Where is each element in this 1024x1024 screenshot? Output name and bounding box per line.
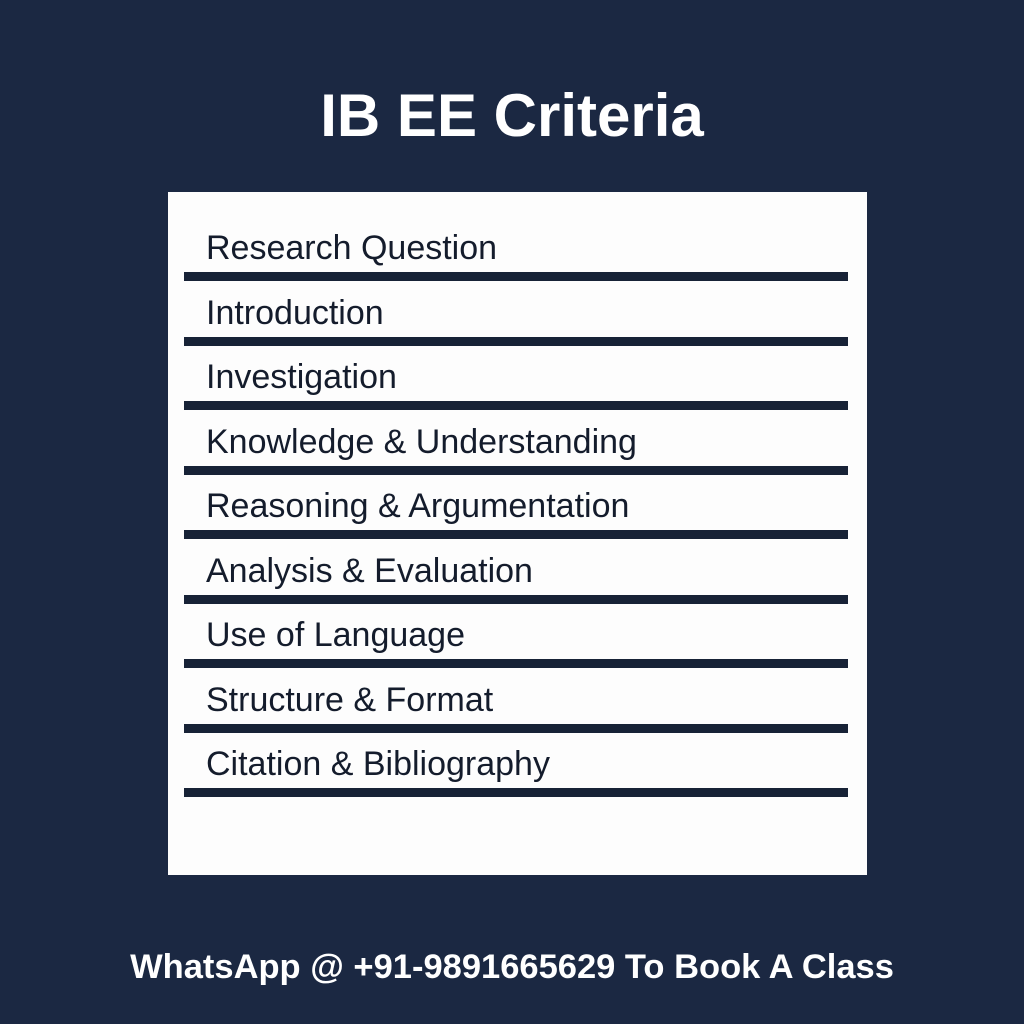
row: Use of Language bbox=[184, 616, 848, 668]
row: Investigation: Investigation bbox=[206, 358, 397, 396]
row: Citation & Bibliography: Citation & Bibliography bbox=[206, 745, 550, 783]
row: Introduction bbox=[184, 294, 848, 346]
row: Citation & Bibliography bbox=[184, 745, 848, 797]
row: Structure & Format bbox=[184, 680, 848, 733]
row: Knowledge & Understanding: Knowledge & Understanding bbox=[206, 422, 637, 460]
row: Research Question: Research Question bbox=[206, 229, 497, 267]
row: Analysis & Evaluation: Analysis & Evaluation bbox=[206, 552, 533, 590]
row: Investigation bbox=[184, 358, 848, 410]
row: Introduction: Introduction bbox=[206, 294, 384, 332]
row: Reasoning & Argumentation: Reasoning & Argumentation bbox=[206, 487, 629, 525]
row: Use of Language: Use of Language bbox=[206, 616, 465, 654]
footer contact: WhatsApp @ +91-9891665629 To Book A Class bbox=[130, 948, 894, 986]
title: IB EE Criteria bbox=[320, 82, 704, 149]
row: Structure & Format: Structure & Format bbox=[206, 680, 493, 718]
panel: criteria list bbox=[168, 192, 867, 875]
row: Reasoning & Argumentation bbox=[184, 487, 848, 539]
row: Analysis & Evaluation bbox=[184, 552, 848, 604]
row: Research Question bbox=[184, 229, 848, 281]
row: Knowledge & Understanding bbox=[184, 422, 848, 475]
